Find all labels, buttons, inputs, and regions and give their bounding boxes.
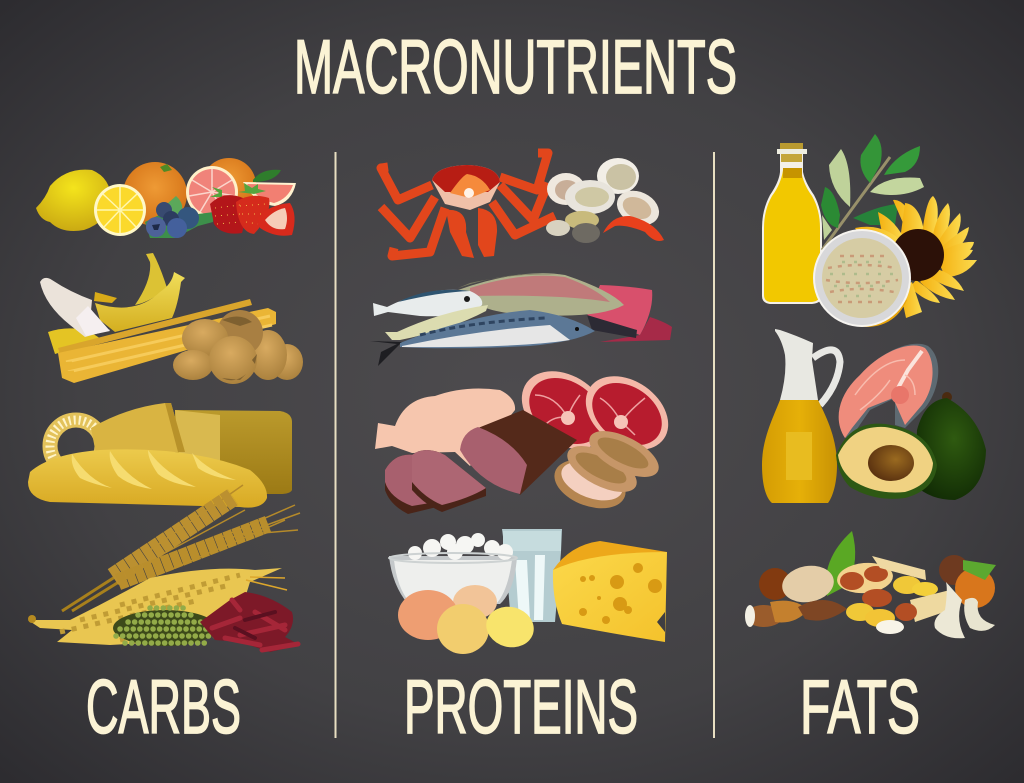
- icon: pasta: [58, 299, 276, 383]
- icon: oysters and clams: [546, 158, 665, 243]
- label: proteins: PROTEINS: [404, 665, 638, 750]
- label: fats: FATS: [800, 665, 920, 750]
- panel: fats: [745, 134, 996, 638]
- icon: mackerel: [370, 310, 595, 366]
- icon: red beans: [200, 592, 300, 652]
- icon: potatoes: [173, 310, 303, 384]
- icon: pork slices: [548, 422, 666, 517]
- icon: crab: [381, 153, 555, 258]
- icon: sardines: [373, 290, 488, 340]
- icon: leaves: [821, 134, 924, 250]
- label: carbs: CARBS: [86, 665, 241, 750]
- icon: avocado half: [836, 424, 937, 499]
- icon: oil bottle: [762, 143, 822, 304]
- icon: nuts: [745, 531, 996, 638]
- icon: green lentils: [113, 608, 217, 646]
- divider: carbs and proteins: [334, 152, 336, 738]
- icon: tuna steak: [587, 285, 672, 342]
- icon: roast beef: [460, 410, 577, 495]
- icon: raw steak: [507, 355, 682, 465]
- icon: sunflower: [855, 196, 977, 318]
- panel: carbs: [28, 158, 303, 652]
- icon: trout: [458, 273, 624, 316]
- icon: whole avocado: [915, 392, 986, 500]
- icon: fruits: [36, 158, 296, 238]
- icon: seed bowl: [813, 229, 911, 327]
- icon: eggs: [398, 585, 538, 654]
- icon: salmon steak: [839, 344, 938, 440]
- icon: cheese: [553, 541, 667, 642]
- icon: glass of milk: [502, 529, 562, 622]
- title: MACRONUTRIENTS: [294, 25, 737, 110]
- icon: grains: [28, 568, 287, 645]
- icon: beef slices: [385, 450, 486, 514]
- icon: oil jug: [762, 329, 840, 503]
- panel: proteins: [370, 153, 682, 654]
- icon: shrimp: [603, 216, 664, 241]
- icon: bread: [28, 403, 292, 508]
- icon: banana: [40, 253, 185, 354]
- icon: cottage cheese bowl: [389, 533, 517, 604]
- divider: proteins and fats: [713, 152, 715, 738]
- icon: wheat: [62, 485, 300, 611]
- icon: chicken: [375, 388, 515, 466]
